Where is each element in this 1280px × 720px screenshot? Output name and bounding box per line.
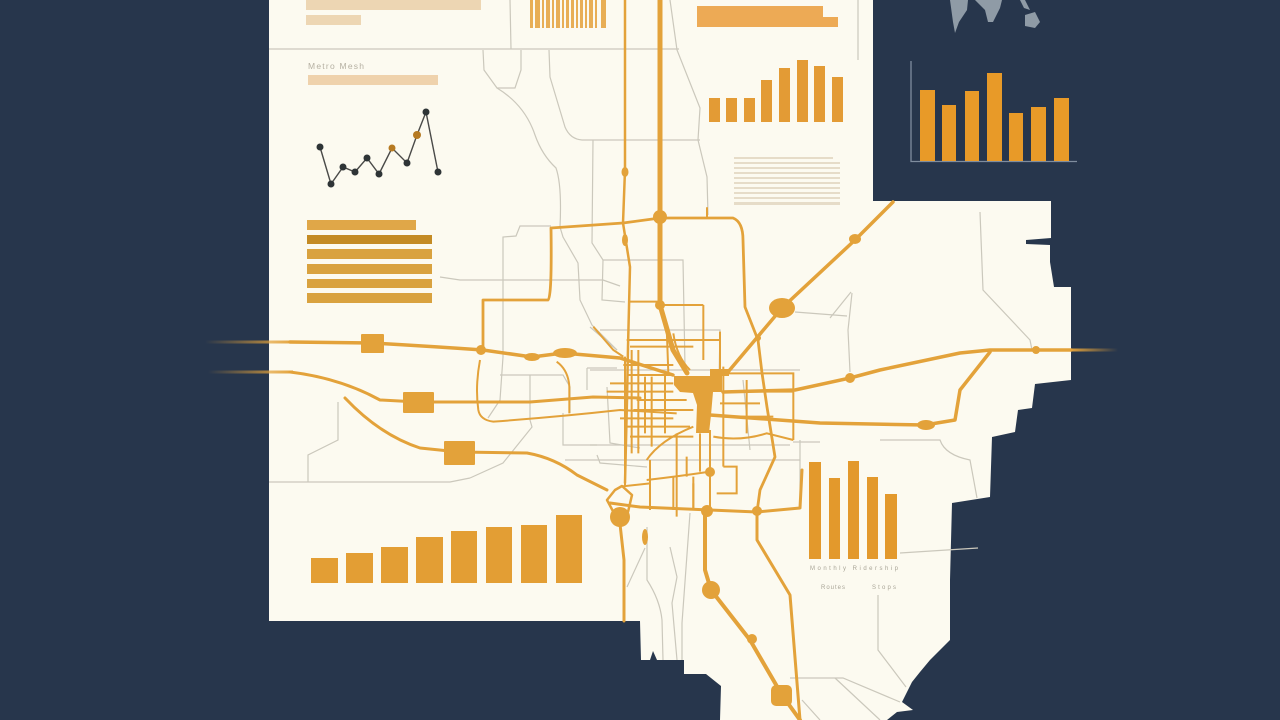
inner loop — [483, 218, 775, 512]
bottom-left column chart — [311, 515, 582, 583]
striped text block — [734, 157, 840, 205]
world map fragment — [950, 0, 1040, 33]
east highway two — [710, 352, 990, 425]
north thin road — [623, 0, 630, 483]
north trunk — [660, 0, 687, 373]
lower-right column chart: Routes — [821, 585, 845, 591]
south loop — [610, 470, 802, 512]
west highway three — [345, 398, 607, 490]
barcode stripes chart — [530, 0, 606, 28]
west highway two — [290, 372, 640, 402]
north-east highway — [728, 202, 893, 372]
map silhouette — [269, 0, 1071, 720]
central city road grid — [477, 302, 793, 517]
top-left pale bars — [306, 0, 481, 25]
lower-right column chart: Monthly Ridership — [810, 566, 899, 572]
main highways — [290, 0, 1071, 720]
south highway two — [757, 512, 800, 720]
south-west road — [619, 515, 624, 621]
horizontal bar chart — [307, 220, 432, 303]
south highway one — [705, 510, 800, 720]
chart heading: Metro Mesh — [308, 61, 364, 71]
east highway one — [723, 350, 1071, 392]
dark panel bar chart — [911, 61, 1077, 162]
line chart — [316, 108, 442, 188]
lower-right column chart — [809, 461, 899, 591]
highway fade ends — [205, 340, 1118, 374]
column chart top right — [709, 60, 843, 122]
chart heading — [308, 61, 438, 85]
top-right stepped bar — [697, 6, 838, 27]
thin gray road network — [269, 0, 1032, 720]
west highway one — [290, 342, 673, 375]
lower-right column chart: Stops — [872, 585, 896, 591]
highway interchange nodes — [361, 167, 1040, 706]
